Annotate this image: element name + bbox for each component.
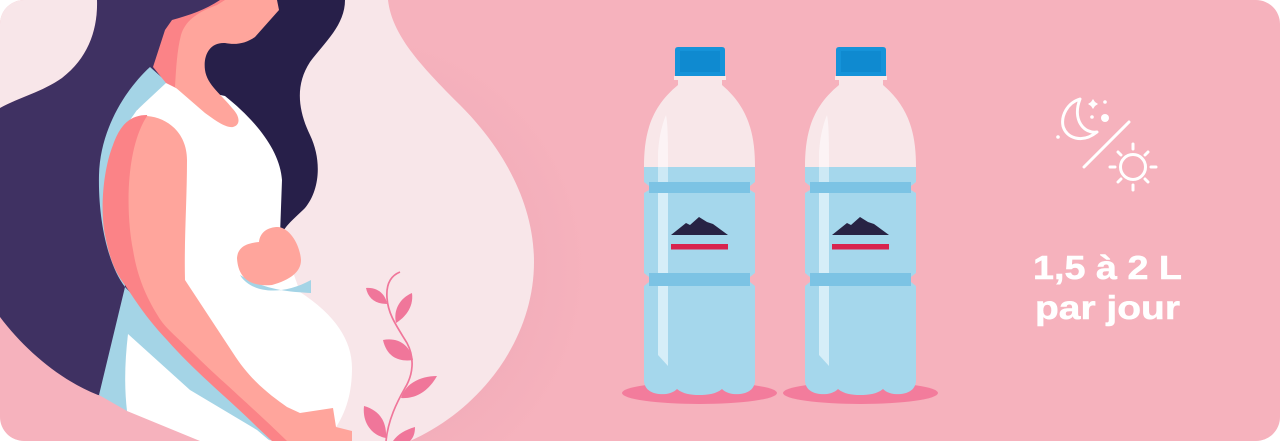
bottle 1: [622, 47, 777, 404]
hand on belly: [237, 227, 301, 285]
neck and face: [153, 0, 279, 127]
top-left light shape: [0, 0, 97, 108]
text: daily amount: par jour: [1035, 289, 1180, 326]
arm: [103, 115, 352, 441]
blue fold under hand: [240, 275, 311, 293]
text: daily amount: [1033, 249, 1182, 326]
text: daily amount: 1,5 à 2 L: [1033, 249, 1182, 286]
plant: [364, 272, 437, 441]
hair back: [0, 0, 230, 400]
light blob: [250, 0, 534, 441]
dress back in blue: [99, 67, 275, 441]
blob shadow: [110, 30, 590, 441]
bottle 2: [783, 47, 938, 404]
icon: moon, stars and sun: [1056, 99, 1156, 190]
hair front: [204, 0, 345, 230]
white dress: [125, 83, 352, 441]
